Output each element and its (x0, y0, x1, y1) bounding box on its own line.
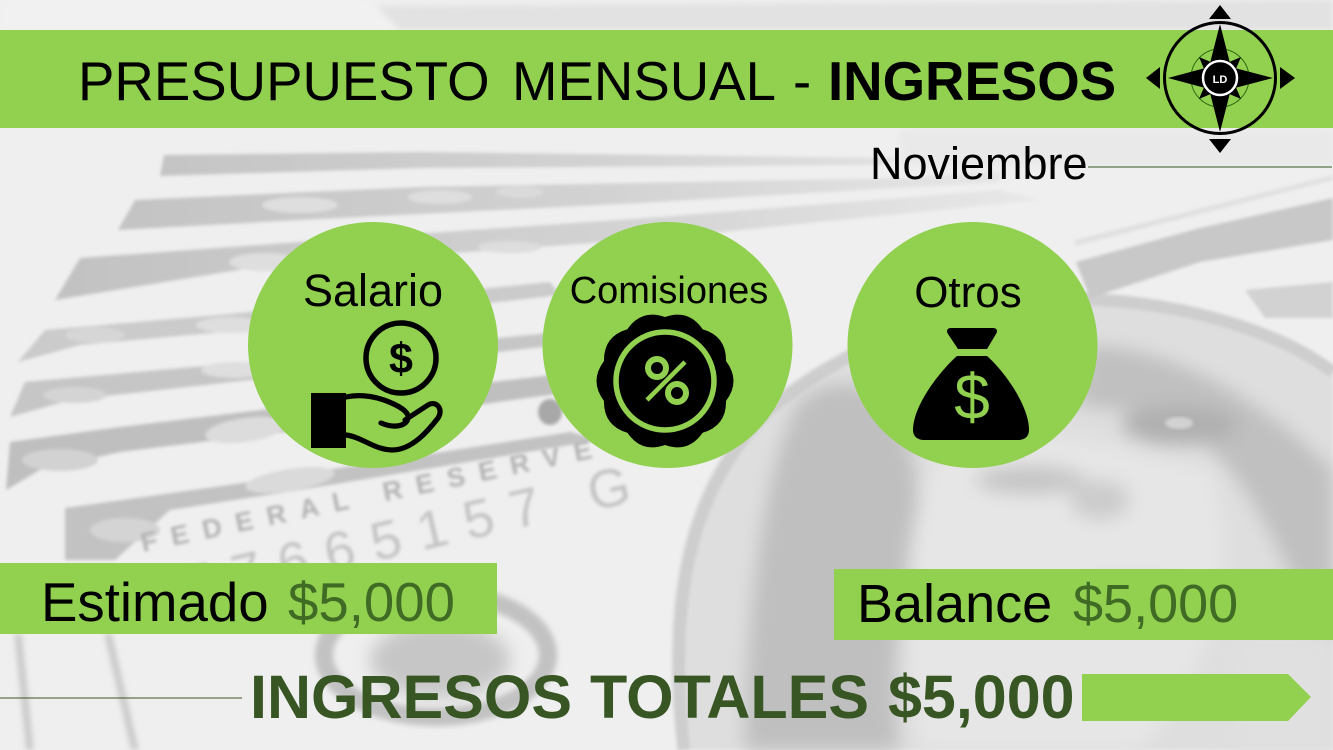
callout: estimado (0, 563, 497, 634)
panel: salario (248, 222, 498, 468)
title text: PRESUPUESTO (78, 51, 490, 112)
total income: INGRESOS (250, 663, 572, 731)
seal (18, 593, 548, 750)
title text: - (793, 51, 811, 112)
panel: comisiones (542, 222, 792, 468)
portrait oval (671, 175, 1333, 750)
top bill edge (0, 0, 1333, 165)
callout: estimado: $5,000 (288, 572, 455, 633)
label: comisiones: Comisiones (570, 270, 768, 312)
icon: money bag (913, 328, 1029, 440)
icon: percent badge (596, 315, 734, 447)
callout: estimado: Estimado (41, 572, 269, 633)
total income (0, 663, 1075, 731)
arrow (1082, 674, 1311, 721)
bill text: serial number: 57665157 G (179, 455, 636, 616)
title banner (0, 30, 1333, 128)
title text: MENSUAL (512, 51, 776, 112)
label: otros: Otros (914, 268, 1022, 317)
icon: hand holding coin: $ (389, 335, 413, 383)
bills fan (6, 152, 1040, 560)
icon: hand holding coin (311, 323, 440, 450)
icon: money bag: $ (954, 361, 990, 433)
icon: compass logo (1146, 5, 1295, 153)
title text: INGRESOS (828, 51, 1116, 112)
callout: balance: Balance (857, 574, 1052, 634)
callout: balance: $5,000 (1073, 574, 1238, 634)
total income: $5,000 (888, 663, 1075, 731)
panel: otros (848, 222, 1098, 468)
light ornaments in bills (262, 197, 338, 213)
month label: Noviembre (870, 138, 1088, 189)
callout: balance (834, 569, 1333, 640)
icon: compass logo: LD (1213, 74, 1227, 86)
bill text: federal reserve: FEDERAL RESERVE (138, 434, 595, 558)
label: salario: Salario (303, 265, 443, 316)
total income: TOTALES (590, 663, 869, 731)
